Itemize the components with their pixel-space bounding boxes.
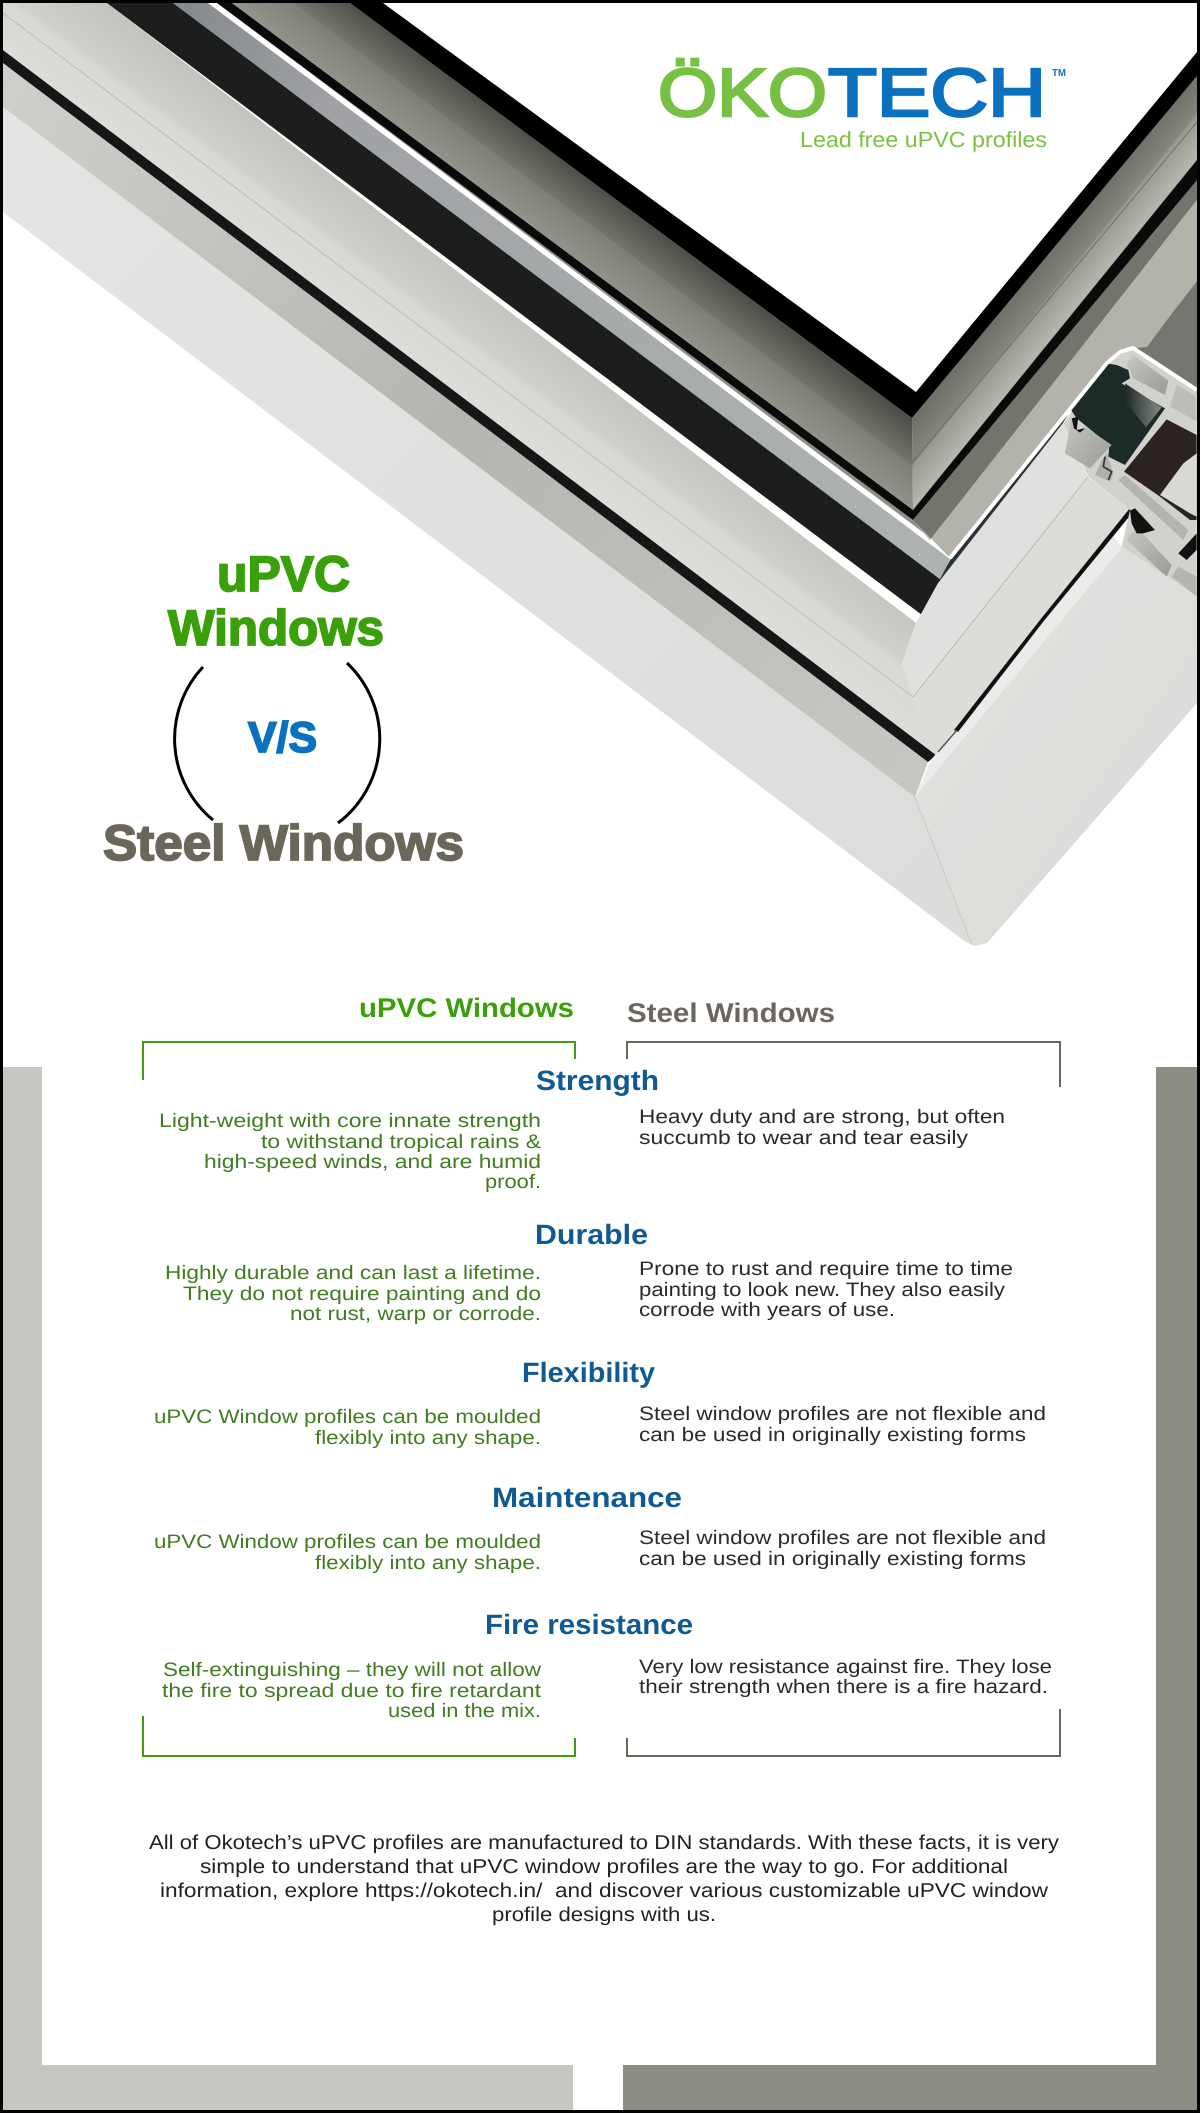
steel strength text: Heavy duty and are strong, but often — [639, 1106, 1005, 1128]
green bracket bottom — [143, 1716, 575, 1756]
title: uPVC: uPVC — [217, 546, 350, 602]
uPVC maintenance text: flexibly into any shape. — [315, 1552, 541, 1574]
logo wordmark — [658, 55, 1066, 131]
uPVC maintenance text: uPVC Window profiles can be moulded — [154, 1531, 541, 1553]
steel flexibility text: can be used in originally existing forms — [639, 1424, 1026, 1446]
row: Durable — [165, 1219, 1013, 1325]
profile face: outer large — [915, 547, 1197, 946]
logo tagline: Lead free uPVC profiles — [800, 127, 1047, 152]
frame band: black gasket — [3, 50, 936, 762]
logo wordmark: TECH — [828, 55, 1046, 131]
frame band: dark gasket — [107, 3, 943, 615]
grey bracket bottom — [627, 1709, 1060, 1756]
uPVC durable text: Highly durable and can last a lifetime. — [165, 1262, 541, 1284]
footer paragraph — [149, 1832, 1059, 1926]
V/S label: V/S — [248, 714, 317, 762]
logo wordmark: TM — [1052, 68, 1066, 79]
uPVC maintenance text — [154, 1531, 541, 1574]
frame band: olive inner right arm — [912, 76, 1197, 510]
footer paragraph: profile designs with us. — [492, 1904, 716, 1926]
profile black seam — [954, 508, 1133, 732]
steel durable text: painting to look new. They also easily — [639, 1279, 1005, 1301]
frame band: light right strip — [913, 200, 1197, 558]
heading: Flexibility: Flexibility — [522, 1357, 655, 1388]
frame band: olive inner left arm — [232, 3, 913, 510]
frame band: black inner rim — [350, 3, 1197, 418]
heading: Maintenance: Maintenance — [492, 1482, 682, 1513]
logo wordmark: ÖKO — [658, 55, 827, 131]
left arc — [175, 667, 213, 820]
column heading: Steel Windows: Steel Windows — [627, 998, 835, 1028]
heading: Strength: Strength — [536, 1065, 659, 1096]
profile face: inner left — [902, 423, 1088, 697]
steel maintenance text — [639, 1527, 1046, 1570]
section body — [1063, 348, 1197, 597]
uPVC fire text: used in the mix. — [388, 1700, 541, 1722]
right grey background panel — [623, 1067, 1197, 2110]
uPVC fire text: Self-extinguishing – they will not allow — [163, 1659, 542, 1681]
title: Steel Windows: Steel Windows — [103, 815, 464, 871]
heading: Durable: Durable — [535, 1219, 648, 1250]
frame band: thin black line right arm — [913, 160, 1197, 520]
uPVC durable text — [165, 1262, 541, 1325]
logo: Okotech — [658, 55, 1066, 152]
steel durable text: corrode with years of use. — [639, 1299, 895, 1321]
steel durable text: Prone to rust and require time to time — [639, 1258, 1013, 1280]
uPVC durable text: not rust, warp or corrode. — [290, 1303, 541, 1325]
front tube — [1065, 417, 1112, 468]
row: Fire resistance — [162, 1609, 1052, 1722]
row: Maintenance — [154, 1482, 1046, 1574]
footer paragraph: simple to understand that uPVC window profiles are the way to go. For additional — [200, 1856, 1008, 1878]
title: Windows: Windows — [168, 600, 384, 656]
steel durable text — [639, 1258, 1013, 1321]
frame band: upper light face — [3, 3, 936, 755]
frame band: metallic strip — [173, 3, 950, 580]
brown pocket — [1124, 419, 1197, 520]
steel maintenance text: Steel window profiles are not flexible and — [639, 1527, 1046, 1549]
upper tube right cell — [1170, 385, 1197, 422]
column heading: uPVC Windows: uPVC Windows — [359, 993, 574, 1023]
window frame corner photo — [3, 3, 1197, 946]
profile cross-section — [1063, 348, 1197, 597]
seam beside white line — [938, 408, 1072, 583]
grey bracket top — [627, 1042, 1060, 1087]
white outline of profile — [950, 348, 1197, 558]
front tube notch — [1072, 417, 1085, 433]
left grey background panel — [3, 1067, 573, 2110]
lower notch — [1130, 508, 1155, 533]
uPVC durable text: They do not require painting and do — [183, 1283, 541, 1305]
uPVC strength text: to withstand tropical rains & — [261, 1131, 541, 1153]
uPVC flexibility text — [154, 1406, 541, 1449]
uPVC strength text — [159, 1110, 541, 1193]
lower tube cell — [1127, 527, 1172, 577]
steel fire text — [639, 1656, 1052, 1698]
frame band: dark olive right strip — [913, 180, 1197, 540]
dark corner behind profile — [1133, 281, 1197, 395]
footer paragraph: All of Okotech’s uPVC profiles are manufactured to DIN standards. With these facts, it is very — [149, 1832, 1059, 1854]
steel flexibility text: Steel window profiles are not flexible and — [639, 1403, 1046, 1425]
uPVC fire text: the fire to spread due to fire retardant — [162, 1680, 542, 1702]
lower tube right cell — [1172, 567, 1197, 597]
profile face: middle — [913, 477, 1130, 755]
frame band: white highlight line — [208, 3, 952, 559]
black sliver — [1178, 533, 1197, 560]
frame band: thin black line — [217, 3, 913, 520]
frame band: outer lower face — [3, 107, 972, 945]
middle strip cell — [1118, 475, 1188, 540]
uPVC fire text — [162, 1659, 542, 1722]
row: Flexibility — [154, 1357, 1046, 1449]
title block: uPVC vs Steel — [103, 546, 464, 871]
uPVC flexibility text: flexibly into any shape. — [315, 1427, 541, 1449]
corner wedge behind white line — [217, 3, 950, 558]
steel flexibility text — [639, 1403, 1046, 1446]
inner white tube — [1160, 453, 1197, 517]
profile bevel strip — [915, 533, 1122, 797]
uPVC strength text: high-speed winds, and are humid — [204, 1151, 541, 1173]
uPVC strength text: Light-weight with core innate strength — [159, 1110, 541, 1132]
uPVC flexibility text: uPVC Window profiles can be moulded — [154, 1406, 541, 1428]
steel fire text: their strength when there is a fire hazard. — [639, 1676, 1048, 1698]
heading: Fire resistance: Fire resistance — [485, 1609, 693, 1640]
uPVC strength text: proof. — [485, 1171, 541, 1193]
dark pocket — [1070, 363, 1165, 465]
green bracket top — [143, 1042, 575, 1080]
upper tube cell — [1127, 355, 1168, 395]
row: Strength — [159, 1065, 1005, 1193]
footer paragraph: information, explore https://okotech.in/ and discover various customizable uPVC window — [160, 1880, 1049, 1902]
right arc — [338, 663, 380, 823]
hook detail — [1095, 453, 1113, 482]
steel strength text: succumb to wear and tear easily — [639, 1127, 968, 1149]
frame band: lower grey step — [3, 63, 928, 797]
steel strength text — [639, 1106, 1005, 1149]
steel fire text: Very low resistance against fire. They lose — [639, 1656, 1052, 1678]
steel maintenance text: can be used in originally existing forms — [639, 1548, 1026, 1570]
